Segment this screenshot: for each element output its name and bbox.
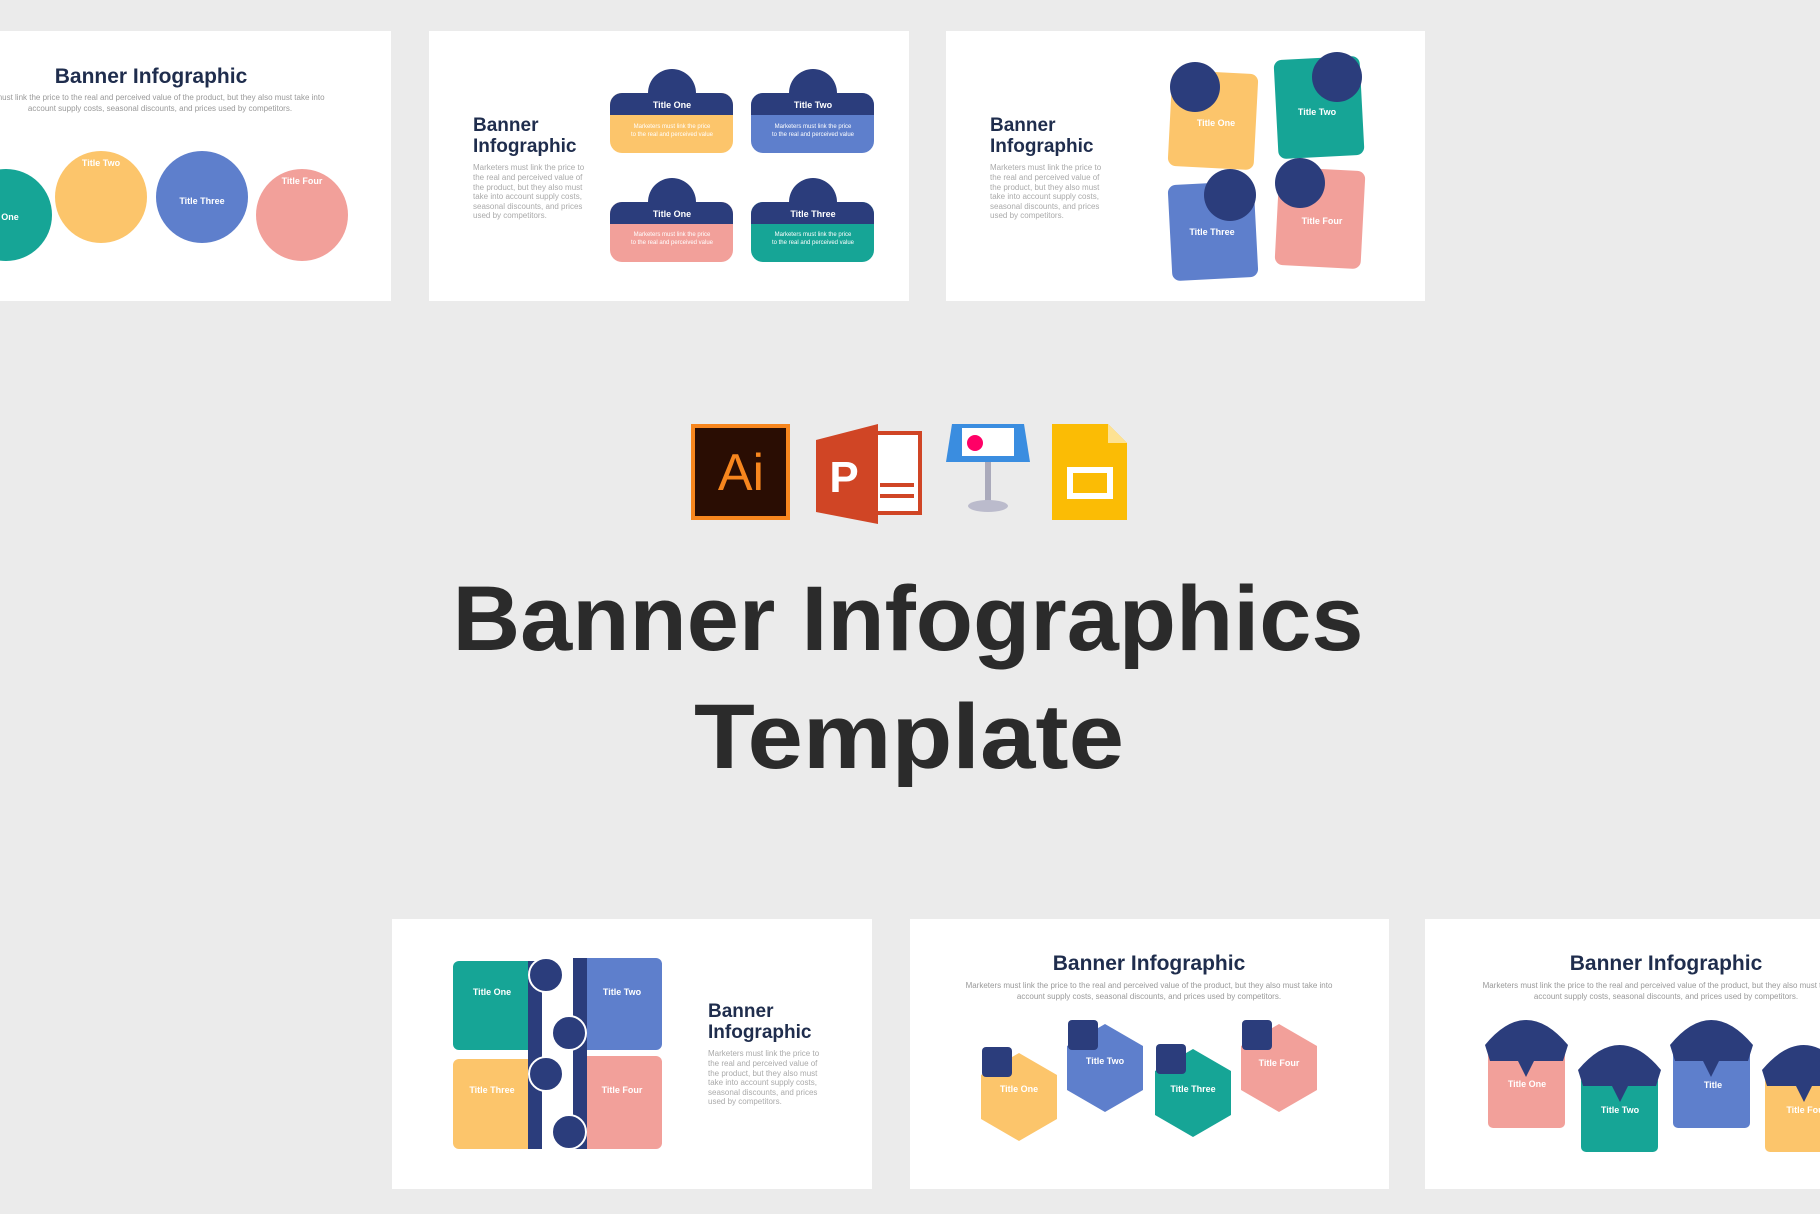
heading: panel 3: Infographic xyxy=(990,136,1094,157)
text: panel 2 body: the real and perceived value of xyxy=(473,173,583,182)
circles: Title Two xyxy=(82,158,121,168)
panel: hexagons xyxy=(910,919,1389,1189)
heading: panel 4: Infographic xyxy=(708,1022,812,1043)
icons: software logos xyxy=(691,424,1127,524)
title: Template xyxy=(694,686,1124,788)
icon: powerpoint: P xyxy=(829,453,859,502)
cards: to the real and perceived value xyxy=(772,240,855,246)
cards: Title Four xyxy=(602,1085,643,1095)
tilted cards: Title One xyxy=(1197,118,1235,128)
shield cards: Title Two xyxy=(1601,1105,1640,1115)
text: panel 2 body xyxy=(473,163,585,220)
text: panel 1 subtitle xyxy=(0,93,325,113)
text: panel 4 body: take into account supply costs, xyxy=(708,1078,817,1087)
text: panel 3 body: take into account supply costs, xyxy=(990,192,1099,201)
panel: four banner cards xyxy=(429,31,909,301)
circles: One xyxy=(1,212,19,222)
text: panel 3 body: Marketers must link the price to xyxy=(990,163,1102,172)
tilted cards: Title Four xyxy=(1302,216,1343,226)
text: panel 2 body: take into account supply costs, xyxy=(473,192,582,201)
text: panel 6 subtitle: account supply costs, seasonal discounts, and prices used by competitors. xyxy=(1534,992,1798,1001)
heading: panel 3 xyxy=(990,115,1094,157)
heading: panel 4 xyxy=(708,1001,812,1043)
text: panel 4 body: used by competitors. xyxy=(708,1097,782,1106)
heading: panel 5: Banner Infographic xyxy=(1053,952,1246,975)
hexagons xyxy=(981,1020,1317,1141)
heading: panel 2: Banner xyxy=(473,115,539,136)
text: panel 1 subtitle: account supply costs, seasonal discounts, and prices used by competitors. xyxy=(28,104,292,113)
text: panel 6 subtitle xyxy=(1483,981,1820,1001)
heading: panel 6: Banner Infographic xyxy=(1570,952,1763,975)
tilted cards: Title Three xyxy=(1189,227,1235,237)
title: Banner Infographics xyxy=(452,568,1364,670)
cards: to the real and perceived value xyxy=(631,132,714,138)
text: panel 1 subtitle: must link the price to the real and perceived value of the product, but they also must take into xyxy=(0,93,325,102)
circles: Title Three xyxy=(179,196,225,206)
text: panel 2 body: the product, but they also must xyxy=(473,183,583,192)
text: panel 2 body: Marketers must link the price to xyxy=(473,163,585,172)
text: panel 4 body: the real and perceived value of xyxy=(708,1059,818,1068)
text: panel 4 body: Marketers must link the price to xyxy=(708,1049,820,1058)
text: panel 3 body: the real and perceived value of xyxy=(990,173,1100,182)
icon: illustrator: Ai xyxy=(718,444,764,502)
cards xyxy=(610,69,874,262)
shield cards xyxy=(1485,1020,1820,1152)
icon: illustrator xyxy=(691,424,790,520)
text: panel 4 body: the product, but they also must xyxy=(708,1069,818,1078)
heading: panel 1: Banner Infographic xyxy=(55,65,248,88)
cards: Title Three xyxy=(790,209,836,219)
cards: Title One xyxy=(653,100,691,110)
text: panel 2 body: seasonal discounts, and prices xyxy=(473,202,582,211)
cards: to the real and perceived value xyxy=(772,132,855,138)
text: panel 2 body: used by competitors. xyxy=(473,211,547,220)
hexagons: Title Three xyxy=(1170,1084,1216,1094)
cards: to the real and perceived value xyxy=(631,240,714,246)
cards xyxy=(453,958,662,1149)
circles xyxy=(0,151,348,261)
panel: vertical banners xyxy=(392,919,872,1189)
tilted cards xyxy=(1168,52,1366,281)
cards: Marketers must link the price xyxy=(775,232,852,238)
text: panel 4 body: seasonal discounts, and prices xyxy=(708,1088,817,1097)
text: panel 4 body xyxy=(708,1049,820,1106)
text: panel 5 subtitle xyxy=(966,981,1333,1001)
text: panel 3 body: used by competitors. xyxy=(990,211,1064,220)
tilted cards: Title Two xyxy=(1298,107,1337,117)
cards: Marketers must link the price xyxy=(634,124,711,130)
shield cards: Title One xyxy=(1508,1079,1546,1089)
text: panel 3 body: seasonal discounts, and prices xyxy=(990,202,1099,211)
cards: Title Three xyxy=(469,1085,515,1095)
text: panel 3 body xyxy=(990,163,1102,220)
hexagons: Title Two xyxy=(1086,1056,1125,1066)
icon: keynote xyxy=(946,424,1030,512)
cards: Marketers must link the price xyxy=(775,124,852,130)
cards: Title Two xyxy=(603,987,642,997)
panel: tilted cards xyxy=(946,31,1425,301)
hexagons: Title Four xyxy=(1259,1058,1300,1068)
circles: Title Four xyxy=(282,176,323,186)
panel: circles slide xyxy=(0,31,391,301)
text: panel 5 subtitle: account supply costs, seasonal discounts, and prices used by competitors. xyxy=(1017,992,1281,1001)
cards: Title One xyxy=(653,209,691,219)
text: panel 5 subtitle: Marketers must link the price to the real and perceived value of the product, but they also must take into xyxy=(966,981,1333,990)
cards: Marketers must link the price xyxy=(634,232,711,238)
heading: panel 3: Banner xyxy=(990,115,1056,136)
shield cards: Title xyxy=(1704,1080,1722,1090)
heading: panel 4: Banner xyxy=(708,1001,774,1022)
hexagons: Title One xyxy=(1000,1084,1038,1094)
icon: google slides xyxy=(1052,424,1127,520)
heading: panel 2: Infographic xyxy=(473,136,577,157)
title xyxy=(452,568,1364,788)
cards: Title Two xyxy=(794,100,833,110)
icon: powerpoint xyxy=(816,424,920,524)
cards: Title One xyxy=(473,987,511,997)
heading: panel 2 xyxy=(473,115,577,157)
text: panel 3 body: the product, but they also must xyxy=(990,183,1100,192)
panel: shield banners xyxy=(1425,919,1820,1189)
